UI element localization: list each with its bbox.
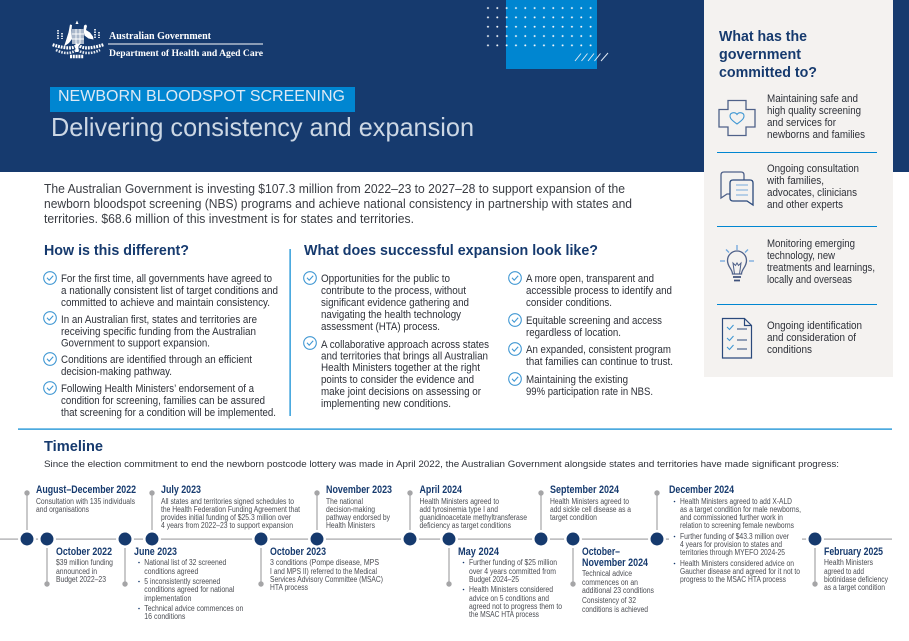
event: September 2024: Health Ministers agreed to [550,497,630,506]
stems [27,493,815,584]
list text column 2: A more open, transparent and [526,273,654,285]
event: June 2023: conditions agreed for national [144,585,235,594]
commitment text: identification: conditions [767,344,813,356]
intro paragraph [44,181,632,226]
event: February 2025: biotinidase deficiency [824,575,888,584]
event: October–November 2024: Technical advice [582,569,632,578]
commitment text: safe services: and services for [767,117,836,129]
list text column 1 [321,273,490,410]
panel heading [719,28,817,81]
list text: For the first time, all governments have agreed to [61,273,272,285]
panel heading: committed to? [719,64,817,81]
commitment text: identification: and consideration of [767,332,857,344]
event: October–November 2024: commences on an [582,578,638,587]
intro paragraph: The Australian Government is investing $107.3 million from 2022–23 to 2027–28 to support expansion of the [44,181,625,196]
event: October–November 2024: additional 23 conditions [582,586,654,595]
list text column 1: assessment (HTA) process. [321,321,440,333]
wordmark: Australian Government [109,31,211,42]
list text column 1: and territories that brings all Australian [321,350,488,362]
event: May 2024: agreed not to progress them to [469,602,563,611]
list text column 2: consider conditions. [526,297,612,309]
commitment text: consultation: and other experts [767,199,844,211]
list text column 1: A collaborative approach across states [321,339,490,351]
event: December 2024: as a target condition for male newborns, [680,505,801,514]
event: October 2022: $39 million funding [56,558,113,567]
list text column 2: Maintaining the existing [526,374,628,386]
event: October–November 2024: October– [582,546,620,558]
blue decorative square [506,0,597,69]
event: November 2023: Health Ministers [326,521,375,530]
list text column 2: 99% participation rate in NBS. [526,386,653,398]
event: September 2024 [550,484,632,522]
event: February 2025: Health Ministers [824,558,873,567]
event: July 2023: July 2023 [161,484,201,496]
event: December 2024: progress to the MSAC HTA process [680,575,786,584]
list text: In an Australian first, states and territories are [61,314,257,326]
commitment text: monitoring: Monitoring emerging [767,238,855,250]
event: July 2023: provides initial funding of $25.3 million over [161,513,291,522]
event: May 2024: Health Ministers considered [469,585,553,594]
list text: condition for screening, families can be assured [61,395,265,407]
event: December 2024 [669,484,801,584]
navy nodes [19,531,823,547]
event: October 2023: I and MPS II) referred to the Medical [270,567,377,576]
list text [61,273,278,419]
commitment text: safe services [767,93,866,141]
event: May 2024: the MSAC HTA process [469,610,539,619]
event: October 2022: Budget 2022–23 [56,575,106,584]
event: April 2024: deficiency as target conditions [420,521,511,530]
event: October 2023 [270,546,383,592]
event: April 2024: April 2024 [420,484,462,496]
section: what does successful expansion look like [304,242,673,410]
header band [0,0,909,172]
icon: coat of arms [52,20,104,56]
list text: Government to support expansion. [61,338,210,350]
banner: newborn bloodspot screening: NEWBORN BLOODSPOT SCREENING [58,88,345,105]
heading: What does successful expansion look like? [304,242,598,259]
list text column 2: regardless of location. [526,327,621,339]
commitment text: safe services: Maintaining safe and [767,93,858,105]
icon: checklist document [722,318,752,358]
list text column 1: implementing new conditions. [321,398,451,410]
event: October–November 2024: conditions is achieved [582,605,648,614]
event: December 2024: Further funding of $43.3 million over [680,532,789,541]
event: December 2024: and commissioned further work in [680,513,783,522]
timeline heading: Timeline [44,438,103,455]
event: June 2023: implementation [144,594,191,603]
check icons [304,272,521,385]
timeline intro: Since the election commitment to end the newborn postcode lottery was made in April 2022, the Australian Government alongside states and territories have made significant progress: [44,459,839,469]
panel heading: What has the [719,28,807,45]
event: June 2023: 16 conditions [144,612,185,621]
commitment text: consultation: Ongoing consultation [767,163,859,175]
event: June 2023: Technical advice commences on [144,604,243,613]
stem end dots [24,490,818,587]
event: May 2024: Further funding of $25 million [469,558,557,567]
commitment text: monitoring: treatments and learnings, [767,262,875,274]
list text: Conditions are identified through an efficient [61,354,252,366]
check icons [44,272,56,394]
list text column 1: navigating the health technology [321,309,462,321]
list text column 1: contribute to the process, without [321,285,466,297]
event: June 2023: June 2023 [134,546,177,558]
event: June 2023 [134,546,243,621]
panel heading: government [719,46,801,63]
commitment text: monitoring [767,238,875,286]
commitment text: identification: Ongoing identification [767,320,862,332]
event: November 2023 [326,484,392,530]
list text column 1: Opportunities for the public to [321,273,450,285]
event: July 2023 [161,484,301,530]
event: November 2023: November 2023 [326,484,392,496]
icon: medical cross with heart [719,100,755,136]
list text: a nationally consistent list of target conditions and [61,285,278,297]
event: July 2023: All states and territories signed schedules to [161,497,295,506]
list text column 2: that families can continue to trust. [526,356,673,368]
event: February 2025: February 2025 [824,546,883,558]
event: November 2023: decision-making [326,505,375,514]
panel: government commitments [704,0,893,377]
banner: newborn bloodspot screening [50,87,355,112]
event: October 2023: October 2023 [270,546,326,558]
intro paragraph: territories. $68.6 million of this investment is for states and territories. [44,211,414,226]
heading: How is this different? [44,242,189,259]
event: May 2024 [458,546,563,619]
event: June 2023: 5 inconsistently screened [144,577,220,586]
event: May 2024: advice on 5 conditions and [469,594,549,603]
event: May 2024: over 4 years committed from [469,567,556,576]
commitment text: safe services: newborns and families [767,129,866,141]
event: October 2022: announced in [56,567,97,576]
event: October 2023: Services Advisory Committee (MSAC) [270,575,383,584]
list text column 1: points to consider the evidence and [321,374,474,386]
event: April 2024 [420,484,527,530]
event: December 2024: 4 years for provision to states and [680,540,782,549]
event: November 2023: The national [326,497,363,506]
intro paragraph: newborn bloodspot screening (NBS) programs and achieve national consistency in partnership with states and [44,196,632,211]
list text: receiving specific funding from the Australian [61,326,256,338]
logo: Australian Government crest and wordmark: Department of Health and Aged Care [109,49,263,59]
commitment text: consultation: with families, [766,175,824,187]
event: April 2024: guanidinoacetate methyltransferase [420,513,527,522]
commitment text: safe services: high quality screening [767,105,861,117]
list text: Following Health Ministers’ endorsement of a [61,383,254,395]
event: August–December 2022: Consultation with 135 individuals [36,497,135,506]
event: October–November 2024: November 2024 [582,557,648,569]
event: July 2023: the Health Federation Funding Agreement that [161,505,301,514]
event: October 2022: October 2022 [56,546,112,558]
event: May 2024: Budget 2024–25 [469,575,520,584]
list text column 1: Health Ministers together at the right [321,362,480,374]
icon: light bulb [720,245,754,280]
title: Delivering consistency and expansion [51,112,474,142]
event: December 2024: territories through MYEFO 2024-25 [680,548,786,557]
event: December 2024: relation to screening female newborns [680,521,794,530]
event: September 2024: target condition [550,513,597,522]
event: August–December 2022: August–December 2022 [36,484,136,496]
icon: speech bubbles [721,172,753,205]
event: November 2023: pathway endorsed by [326,513,390,522]
event: April 2024: add tyrosinemia type I and [420,505,498,514]
timeline axis with markers [0,490,892,587]
event: December 2024: Health Ministers considered advice on [680,559,794,568]
event: October 2023: HTA process [270,583,308,592]
event: August–December 2022 [36,484,136,514]
list text column 2: An expanded, consistent program [526,344,671,356]
list text: that screening for a condition will be implemented. [61,407,276,419]
commitment text: consultation: advocates, clinicians [767,187,858,199]
commitment text: monitoring: technology, new [767,250,835,262]
event: October 2023: 3 conditions (Pompe disease, MPS [270,558,379,567]
event: December 2024: Health Ministers agreed to add X-ALD [680,497,792,506]
event: July 2023: 4 years from 2022–23 to support expansion [161,521,293,530]
event: September 2024: September 2024 [550,484,619,496]
list text: decision-making pathway. [61,366,172,378]
event: February 2025: agreed to add [824,567,864,576]
event: February 2025 [824,546,888,592]
event: October–November 2024 [582,546,654,614]
event: December 2024: December 2024 [669,484,734,496]
commitment text: identification [767,320,862,356]
dot pattern [483,3,595,50]
commitment text: monitoring: locally and overseas [767,274,853,286]
commitment text: consultation [766,163,859,211]
event: October 2022 [56,546,113,584]
list text column 1: significant evidence gathering and [321,297,469,309]
list text column 2: Equitable screening and access [526,315,663,327]
list text column 2: accessible process to identify and [526,285,672,297]
list text: committed to achieve and maintain consistency. [61,297,270,309]
event: August–December 2022: and organisations [36,505,89,514]
event: February 2025: as a target condition [824,583,885,592]
list text column 2 [526,273,673,398]
event: September 2024: add sickle cell disease as a [550,505,632,514]
event: June 2023: conditions agreed [144,567,198,576]
list text column 1: make joint decisions on assessing or [321,386,481,398]
event: April 2024: Health Ministers agreed to [420,497,500,506]
event: May 2024: May 2024 [458,546,499,558]
section: how is this different [44,242,278,419]
logo: Australian Government crest and wordmark [52,20,263,59]
hatch marks [575,53,608,61]
event: June 2023: National list of 32 screened [144,558,226,567]
event: December 2024: Gaucher disease and agreed for it not to [680,567,801,576]
event: October–November 2024: Consistency of 32 [582,596,636,605]
